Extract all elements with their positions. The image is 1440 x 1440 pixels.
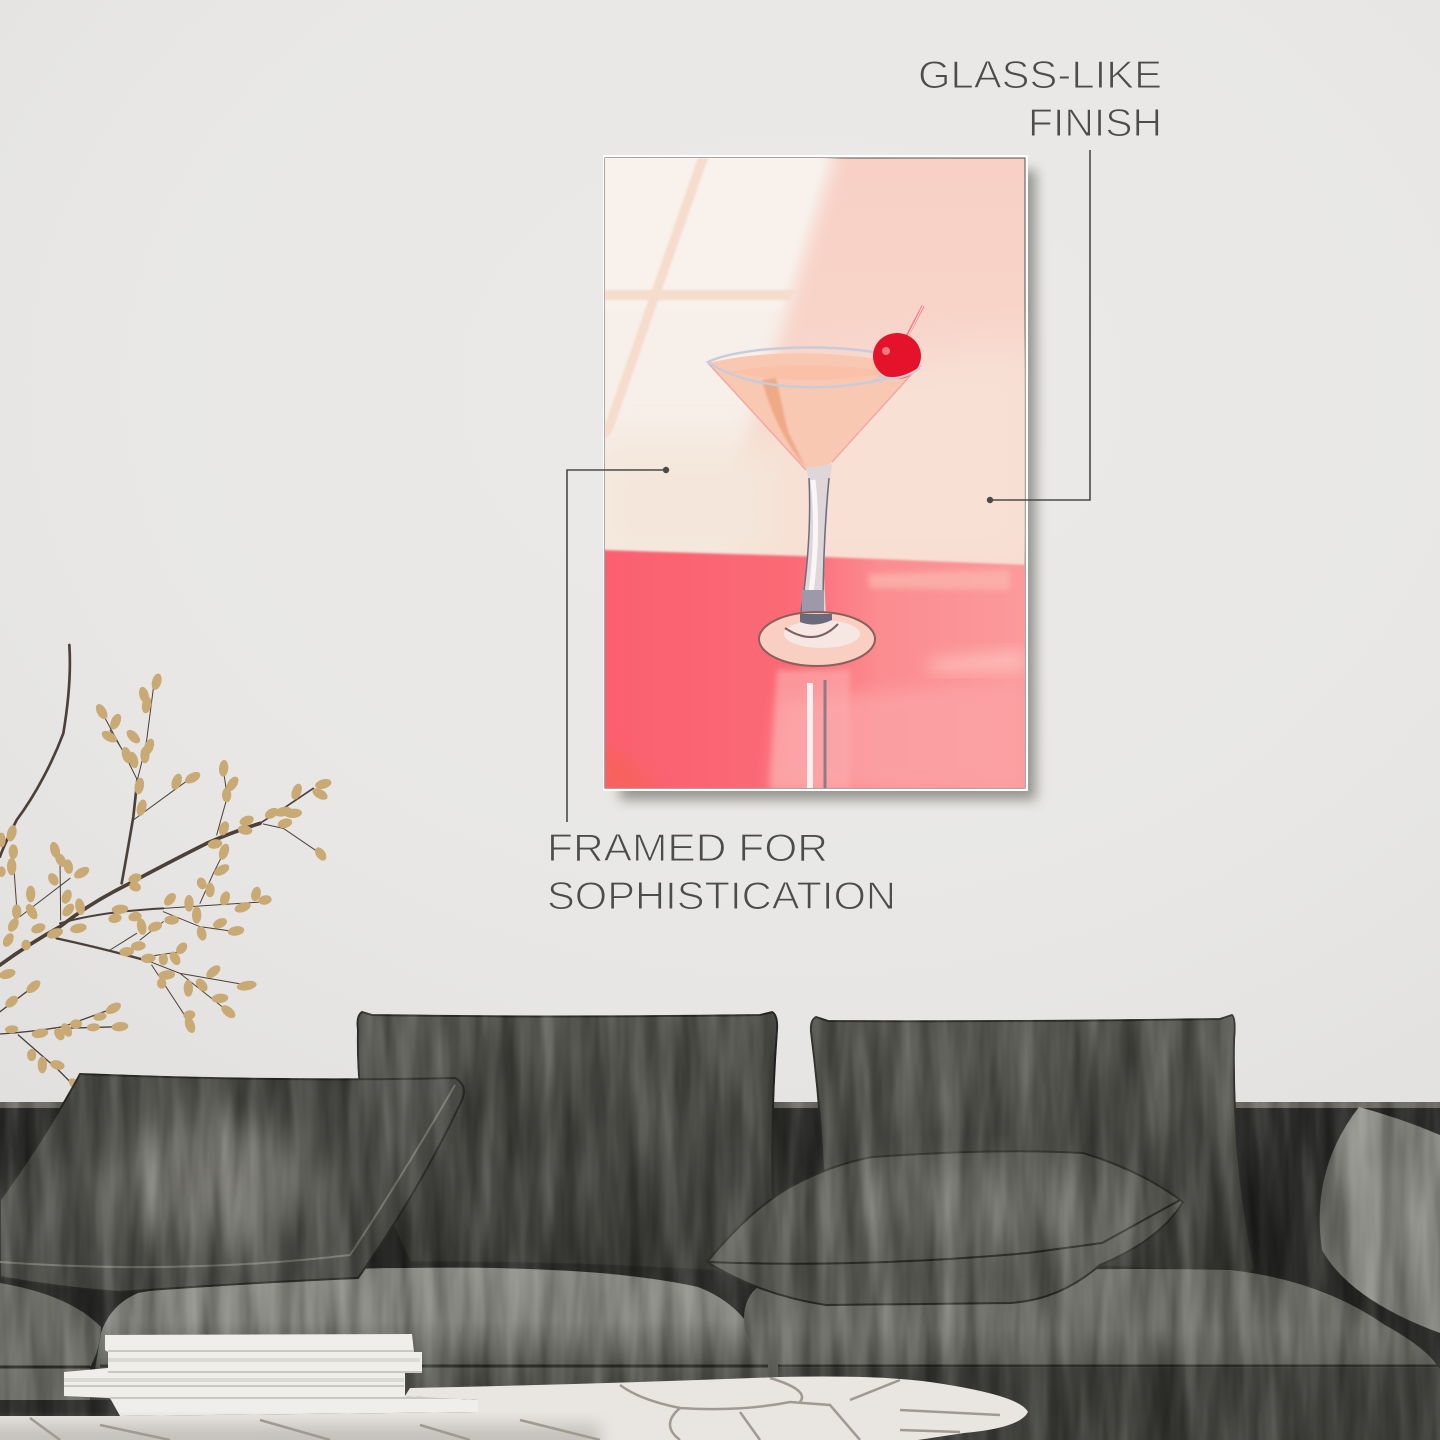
sofa back: [0, 1102, 1440, 1440]
light on the painted wall: [590, 150, 838, 560]
seat cushion far left: [0, 1283, 101, 1400]
leader line: framed: [567, 467, 669, 822]
wall background: [0, 0, 1440, 1110]
painted table: [600, 550, 1030, 795]
heading: framed for sophistication: SOPHISTICATION: [547, 875, 896, 918]
heading: framed for sophistication: [547, 827, 896, 918]
back cushion right: [811, 1015, 1255, 1275]
arm rest right: [1320, 1107, 1440, 1333]
seat cushion left: [90, 1268, 770, 1400]
framed artwork: [590, 150, 1040, 800]
seat front right: [778, 1368, 1440, 1440]
heading: glass-like finish: GLASS-LIKE: [918, 54, 1162, 97]
sofa: [0, 1012, 1440, 1440]
callout: glass-like finish: [918, 54, 1162, 503]
seat cushion right: [744, 1269, 1440, 1440]
throw pillow left: [0, 1074, 464, 1292]
glass reflection: [770, 670, 850, 790]
heading: glass-like finish: [918, 54, 1162, 145]
seat piping: [0, 1366, 1440, 1367]
callout: framed for sophistication: [547, 467, 896, 918]
books stack: [64, 1334, 478, 1416]
martini glass: [708, 347, 920, 666]
heading: framed for sophistication: FRAMED FOR: [547, 827, 828, 870]
leader line: glass-like finish: [987, 150, 1090, 503]
heading: glass-like finish: FINISH: [1028, 102, 1162, 145]
plant branches: [0, 645, 333, 1094]
cherry garnish: [873, 306, 923, 379]
throw pillow right: [707, 1151, 1183, 1305]
marble table: [0, 1377, 1028, 1440]
back cushion left: [358, 1012, 777, 1275]
